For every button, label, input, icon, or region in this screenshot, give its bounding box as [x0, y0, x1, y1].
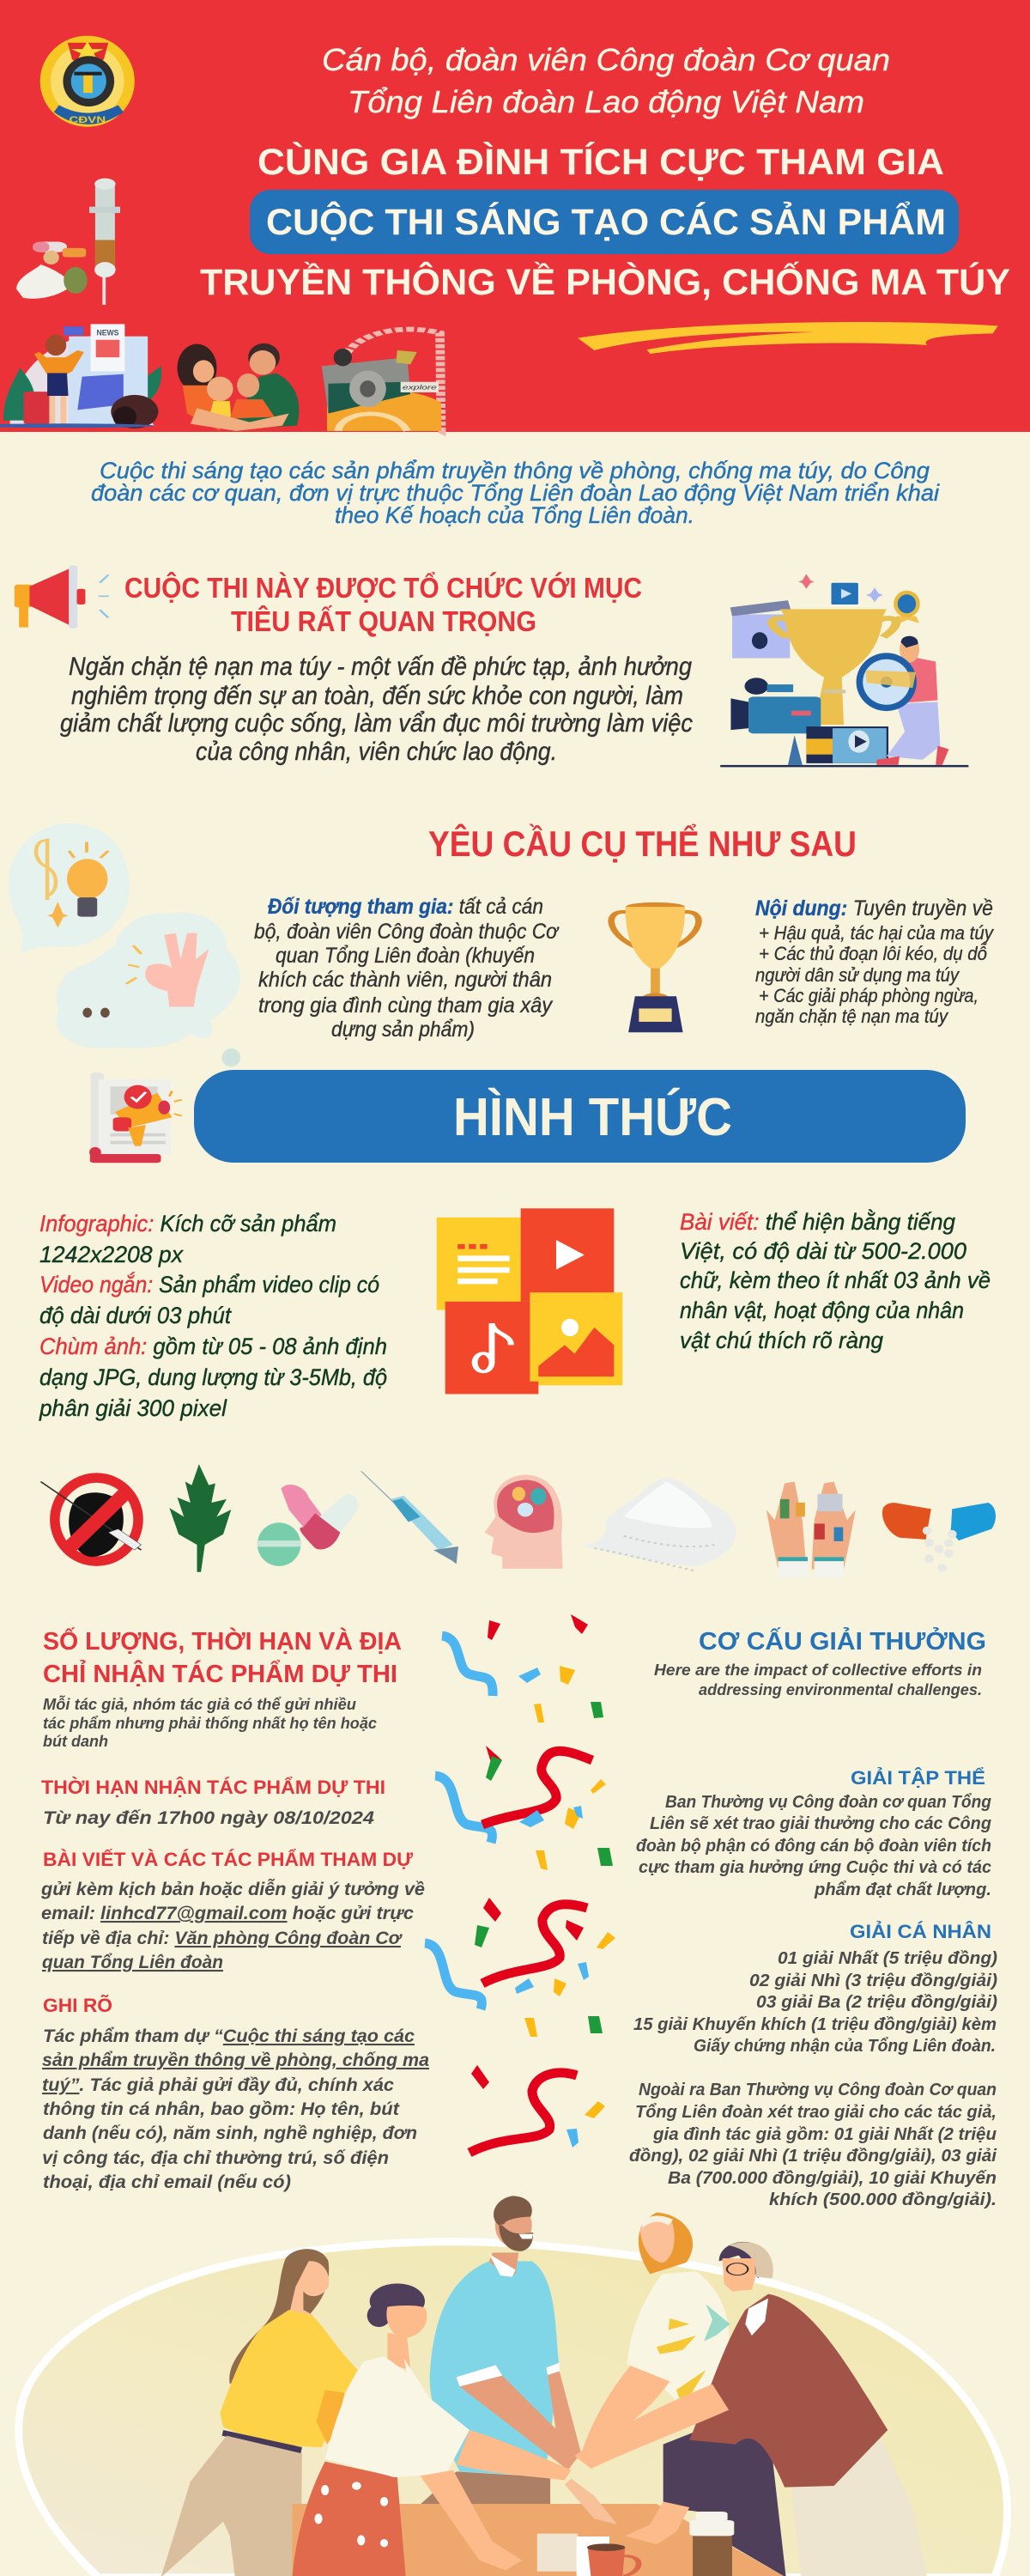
- icon: media tiles: [437, 1208, 622, 1394]
- union logo: CĐVN: [69, 115, 106, 125]
- collective prize: GIẢI TẬP THỂ: [851, 1767, 985, 1789]
- note details: sản phẩm truyền thông về phòng, chống ma: [42, 2050, 429, 2070]
- intro paragraph: Cuộc thi sáng tạo các sản phẩm truyền thông về phòng, chống ma túy, do Công: [100, 458, 930, 483]
- text: content: + Các thủ đoạn lôi kéo, dụ dỗ: [759, 943, 987, 964]
- icon: woman with news: NEWS: [96, 328, 118, 337]
- deadline: THỜI HẠN NHẬN TÁC PHẨM DỰ THI: [41, 1777, 385, 1798]
- collective prize: Liên sẽ xét trao giải thưởng cho các Công: [650, 1814, 991, 1833]
- icon: thought bubbles: [9, 823, 240, 1066]
- heading: prizes: Here are the impact of collective efforts in: [654, 1662, 982, 1679]
- woman in white and red skirt: [292, 2283, 617, 2576]
- text: format details left: Video ngắn: Sản phẩm video clip có: [39, 1271, 379, 1297]
- heading: prizes: CƠ CẤU GIẢI THƯỞNG: [699, 1626, 986, 1656]
- note details: vị công tác, địa chỉ thường trú, số điện: [42, 2148, 389, 2168]
- icon: trophy: [611, 902, 699, 1032]
- collective prize: phẩm đạt chất lượng.: [814, 1880, 991, 1899]
- heading: prizes: [654, 1626, 986, 1698]
- individual prize: Giấy chứng nhận của Tổng Liên đoàn.: [694, 2037, 996, 2056]
- text: format details left: Chùm ảnh: gồm từ 05 - 08 ảnh định: [39, 1334, 387, 1359]
- table with cup and bottle: [292, 2504, 786, 2576]
- note details: [42, 1995, 429, 2192]
- collective prize: đoàn bộ phận có đông cán bộ đoàn viên tích: [636, 1837, 991, 1856]
- intro paragraph: [91, 458, 940, 528]
- text: format details left: [39, 1211, 387, 1421]
- header titles: Tổng Liên đoàn Lao động Việt Nam: [348, 84, 864, 119]
- note: [43, 1695, 377, 1750]
- text: format details right: chữ, kèm theo ít nhất 03 ảnh về: [680, 1267, 991, 1293]
- individual prize: 01 giải Nhất (5 triệu đồng): [778, 1949, 997, 1968]
- individual prize: 15 giải Khuyến khích (1 triệu đồng/giải) kèm: [633, 2015, 997, 2034]
- note details: danh (nếu có), năm sinh, nghề nghiệp, đơn: [43, 2123, 417, 2143]
- text: participants: [254, 895, 560, 1042]
- text: format details right: Việt, có độ dài từ 500-2.000: [680, 1238, 966, 1264]
- header titles: Cán bộ, đoàn viên Công đoàn Cơ quan: [322, 42, 890, 77]
- note details: thông tin cá nhân, bao gồm: Họ tên, bút: [43, 2099, 400, 2119]
- additional prizes: Ba (700.000 đồng/giải), 10 giải Khuyến: [668, 2169, 997, 2188]
- text: participants: khích các thành viên, người thân: [258, 968, 552, 992]
- text: format details right: nhân vật, hoạt động của nhân: [680, 1297, 964, 1323]
- illustration: trophy and film crew: [720, 574, 968, 767]
- heading: requirements: YÊU CẦU CỤ THỂ NHƯ SAU: [428, 823, 857, 864]
- text: content: ngăn chặn tệ nạn ma túy: [755, 1005, 949, 1027]
- intro paragraph: đoàn các cơ quan, đơn vị trực thuộc Tổng Liên đoàn Lao động Việt Nam triển khai: [91, 480, 940, 506]
- collective prize: [636, 1767, 991, 1899]
- text: format details left: Infographic: Kích cỡ sản phẩm: [39, 1211, 336, 1236]
- text: participants: trong gia đình cùng tham gia xây: [258, 993, 553, 1018]
- text: format details left: độ dài dưới 03 phút: [39, 1303, 232, 1328]
- text: format details right: Bài viết: thể hiện bằng tiếng: [680, 1208, 955, 1235]
- collective prize: Ban Thường vụ Công đoàn cơ quan Tổng: [665, 1793, 991, 1812]
- note details: GHI RÕ: [43, 1995, 112, 2016]
- text: submission info: [40, 1626, 429, 2192]
- deadline: [41, 1777, 385, 1828]
- woman in yellow: [161, 2249, 358, 2576]
- submissions: quan Tổng Liên đoàn: [42, 1953, 223, 1972]
- submissions: [40, 1849, 425, 1972]
- icon: family: [178, 343, 299, 431]
- text: format details left: dạng JPG, dung lượng từ 3-5Mb, độ: [39, 1364, 387, 1390]
- note details: tuý”. Tác giả phải gửi đầy đủ, chính xác: [42, 2075, 394, 2095]
- text: participants: Đối tượng tham gia: tất cả cán: [268, 895, 543, 919]
- heading: competition goal: CUỘC THI NÀY ĐƯỢC TỔ CHỨC VỚI MỤC: [124, 571, 642, 604]
- header titles: CÙNG GIA ĐÌNH TÍCH CỰC THAM GIA: [258, 141, 944, 183]
- text: participants: bộ, đoàn viên Công đoàn thuộc Cơ: [254, 920, 560, 944]
- icon: document megaphone: [89, 1072, 182, 1163]
- text: format details right: [680, 1208, 991, 1353]
- submissions: BÀI VIẾT VÀ CÁC TÁC PHẨM THAM DỰ: [43, 1849, 414, 1870]
- heading: prizes: addressing environmental challenges.: [699, 1681, 982, 1698]
- individual prize: [633, 1921, 997, 2056]
- text: content: + Hậu quả, tác hại của ma túy: [759, 922, 995, 944]
- header titles: TRUYỀN THÔNG VỀ PHÒNG, CHỐNG MA TÚY: [200, 261, 1010, 303]
- icon row: drugs: [40, 1464, 996, 1578]
- man with hat and glasses: [574, 2242, 927, 2576]
- yellow brush swoosh: [578, 322, 998, 354]
- note: bút danh: [43, 1733, 108, 1750]
- goal paragraph: [60, 653, 693, 766]
- text: format details left: phân giải 300 pixel: [39, 1395, 227, 1421]
- collective prize: cực tham gia hưởng ứng Cuộc thi và có tác: [639, 1858, 991, 1877]
- heading: quantity, deadline and address: [43, 1626, 402, 1688]
- icon: head with pills: [485, 1474, 563, 1569]
- icon: pills: [258, 1485, 358, 1566]
- note: tác phẩm nhưng phải thống nhất họ tên hoặc: [43, 1715, 377, 1732]
- goal paragraph: giảm chất lượng cuộc sống, làm vẩn đục môi trường làm việc: [60, 709, 693, 738]
- additional prizes: Ngoài ra Ban Thường vụ Công đoàn Cơ quan: [639, 2081, 997, 2099]
- icon: no drugs sign: [40, 1473, 143, 1566]
- icon: syringe and pills: [16, 179, 120, 305]
- text: content: Nội dung: Tuyên truyền về: [755, 896, 993, 920]
- submissions: email: linhcd77@gmail.com hoặc gửi trực: [41, 1904, 414, 1923]
- text: prize structure: [629, 1626, 997, 2209]
- union logo: [40, 36, 135, 127]
- heading: quantity, deadline and address: SỐ LƯỢNG, THỜI HẠN VÀ ĐỊA: [43, 1626, 402, 1656]
- woman with orange hair: [581, 2213, 786, 2576]
- header titles: CUỘC THI SÁNG TẠO CÁC SẢN PHẨM: [266, 201, 946, 243]
- text: participants: quan Tổng Liên đoàn (khuyến: [276, 944, 535, 968]
- heading: quantity, deadline and address: CHỈ NHẬN TÁC PHẨM DỰ THI: [43, 1659, 397, 1688]
- icon: open capsule: [882, 1503, 996, 1572]
- text: content: + Các giải pháp phòng ngừa,: [759, 985, 978, 1006]
- icon: white powder: [583, 1478, 736, 1571]
- icon: syringe: [361, 1471, 458, 1564]
- heading: competition goal: TIÊU RẤT QUAN TRỌNG: [231, 605, 536, 637]
- goal paragraph: nghiêm trọng đến sự an toàn, đến sức khỏe con người, làm: [71, 682, 683, 710]
- submissions: gửi kèm kịch bản hoặc diễn giải ý tưởng về: [40, 1880, 425, 1899]
- additional prizes: Tổng Liên đoàn xét trao giải cho các tác giả,: [635, 2103, 997, 2122]
- banner: format: [194, 1070, 966, 1163]
- icon: woman with news: [0, 324, 161, 428]
- deadline: Từ nay đến 17h00 ngày 08/10/2024: [43, 1808, 374, 1828]
- icon: megaphone: [15, 565, 109, 629]
- header titles: [200, 42, 1010, 303]
- note: Mỗi tác giả, nhóm tác giả có thể gửi nhiều: [43, 1695, 356, 1713]
- illustration: team joining hands: [19, 2196, 1008, 2576]
- goal paragraph: Ngăn chặn tệ nạn ma túy - một vấn đề phức tạp, ảnh hưởng: [69, 653, 692, 681]
- text: content: [755, 896, 995, 1027]
- goal paragraph: của công nhân, viên chức lao động.: [196, 738, 557, 766]
- icon: cannabis leaf: [169, 1464, 231, 1572]
- man in blue: [421, 2196, 581, 2505]
- text: format details left: 1242x2208 px: [39, 1242, 184, 1267]
- submissions: tiếp về địa chỉ: Văn phòng Công đoàn Cơ: [42, 1929, 403, 1948]
- heading: competition goal: [124, 571, 642, 637]
- additional prizes: khích (500.000 đồng/giải).: [769, 2190, 997, 2209]
- header banner: [0, 0, 1030, 432]
- individual prize: 02 giải Nhì (3 triệu đồng/giải): [749, 1971, 997, 1990]
- confetti divider: [425, 1614, 615, 2153]
- additional prizes: đồng), 02 giải Nhì (1 triệu đồng/giải), 03 giải: [629, 2147, 997, 2166]
- individual prize: 03 giải Ba (2 triệu đồng/giải): [756, 1993, 997, 2012]
- text: participants: dựng sản phẩm): [331, 1018, 475, 1042]
- individual prize: GIẢI CÁ NHÂN: [850, 1921, 991, 1942]
- note details: Tác phẩm tham dự “ Cuộc thi sáng tạo các: [43, 2026, 415, 2046]
- icon: camera collage: [322, 330, 441, 431]
- text: content: người dân sử dụng ma túy: [755, 964, 960, 986]
- additional prizes: gia đình tác giả gồm: 01 giải Nhất (2 triệu: [652, 2125, 997, 2144]
- icon: hands holding medicine: [766, 1482, 856, 1578]
- intro paragraph: theo Kế hoạch của Tổng Liên đoàn.: [335, 502, 694, 528]
- additional prizes: [629, 2081, 997, 2209]
- banner: format: HÌNH THỨC: [453, 1088, 732, 1147]
- icon: camera collage: explore: [403, 385, 437, 392]
- text: format details right: vật chú thích rõ ràng: [680, 1327, 883, 1353]
- note details: thoại, địa chỉ email (nếu có): [43, 2172, 291, 2192]
